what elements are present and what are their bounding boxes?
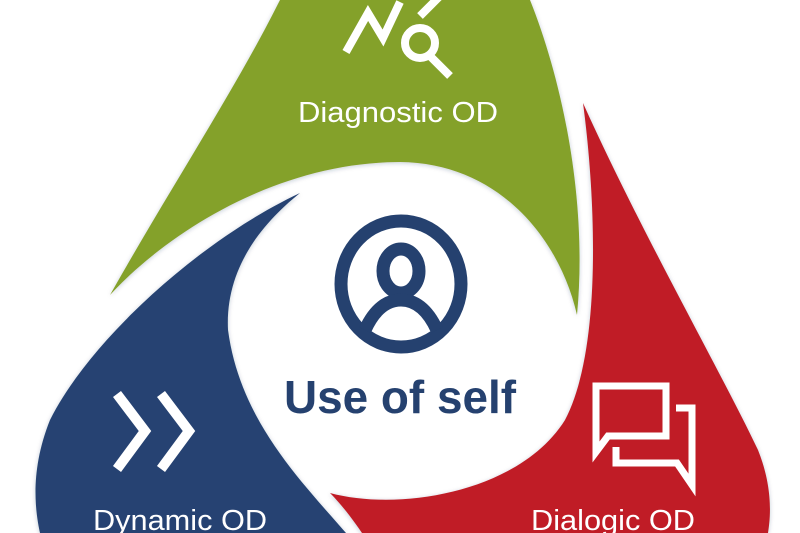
center: use of self [284,221,517,423]
label: Diagnostic OD: Diagnostic OD [298,97,498,129]
panel: dynamic (blue) [36,193,346,533]
icon: person in circle [341,221,461,347]
icon: chart with magnifier [346,0,450,76]
icon: double chevron [117,394,189,469]
panel: diagnostic (green) [110,0,580,315]
panel: dialogic (red) [330,103,770,533]
title: Use of self: Use of self [284,371,517,423]
icon: chat bubbles [596,386,692,485]
